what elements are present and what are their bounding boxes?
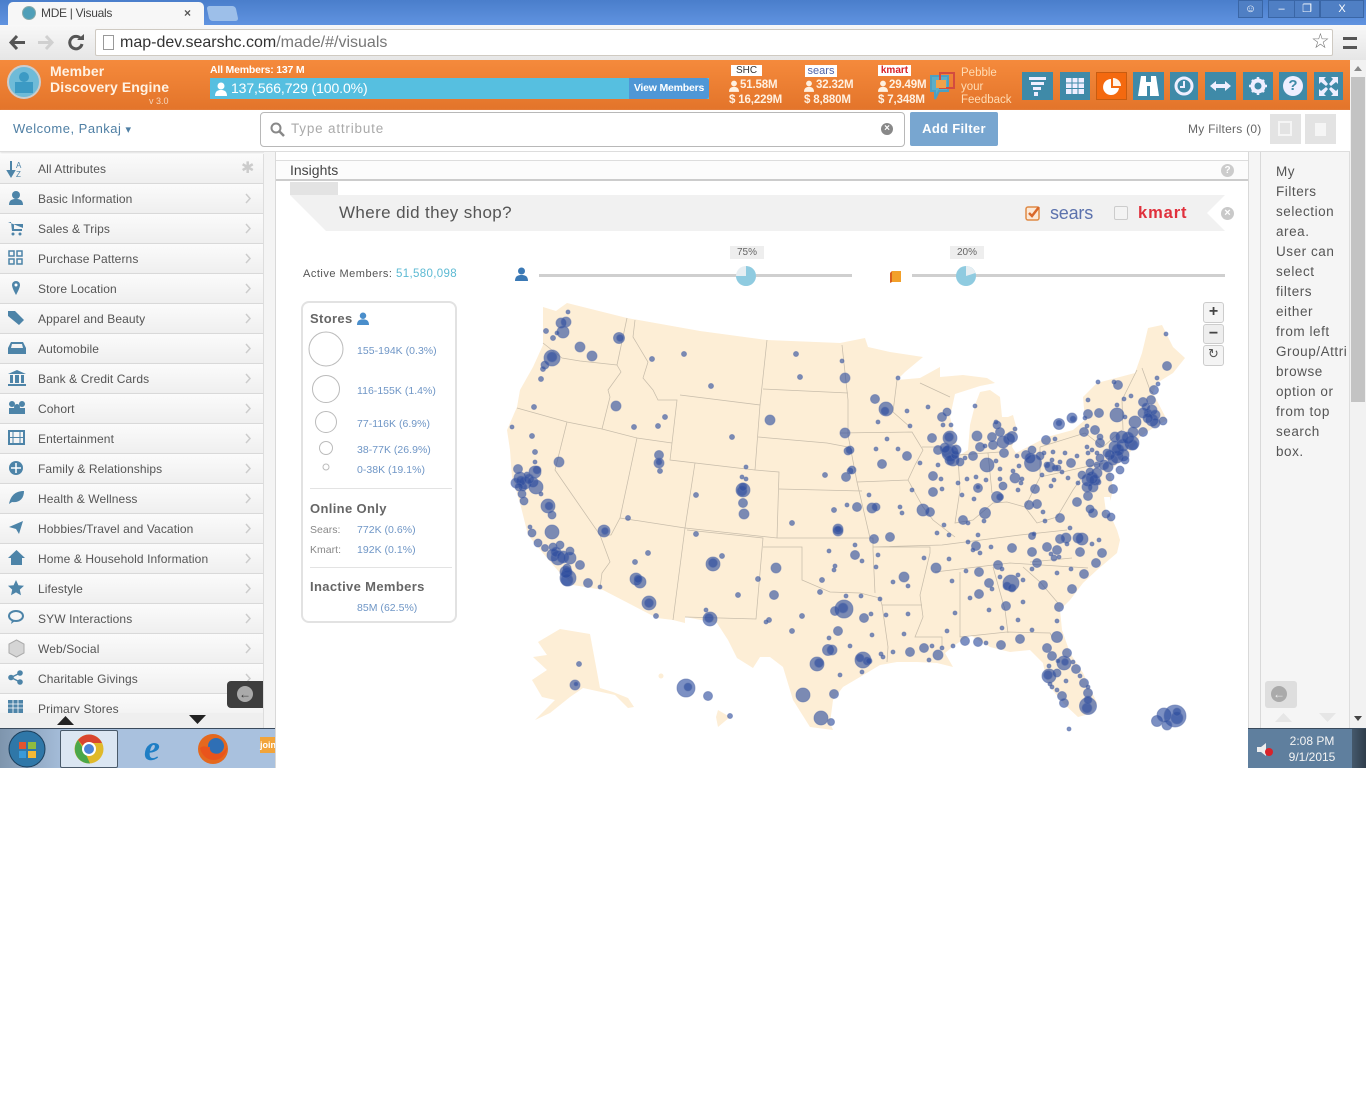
window controls [1238, 0, 1364, 18]
help button [1279, 72, 1307, 100]
address bar: ☆ [1311, 30, 1330, 53]
window controls: X [1338, 3, 1346, 15]
active tab [8, 2, 204, 25]
internet explorer icon: e [144, 728, 160, 768]
attribute row: lifestyle [0, 574, 263, 604]
members count: 137,566,729 (100.0%) [231, 80, 368, 96]
page scrollbar [1350, 60, 1366, 728]
member slider [515, 246, 852, 286]
sears logo: sears [1050, 203, 1093, 223]
stores heading: Stores [310, 311, 353, 326]
attribute row: entertainment [0, 424, 263, 454]
panel collapse button: ← [1273, 687, 1285, 701]
chrome taskbar button [60, 730, 118, 768]
kmart stats [878, 65, 926, 106]
sidebar collapse button [227, 681, 263, 708]
legend label: 77-116K (6.9%) [357, 418, 430, 430]
scrollbar down arrow [1354, 716, 1362, 721]
panel scroll down [1320, 713, 1336, 722]
attribute row: purchase patterns: Purchase Patterns [38, 252, 138, 266]
attribute row: basic information [0, 184, 263, 214]
clear icon: × [884, 123, 890, 134]
feedback bubble icon [930, 72, 955, 100]
legend label: 38-77K (26.9%) [357, 444, 431, 456]
sidebar collapse button: ← [239, 687, 251, 701]
attribute row: automobile [0, 334, 263, 364]
sears online label: Sears: [310, 524, 340, 536]
attribute row: web and social [0, 634, 263, 664]
add filter button: Add Filter [922, 121, 986, 136]
attribute row: purchase patterns [0, 244, 263, 274]
slider track [912, 274, 1225, 277]
attribute row: all attributes: A [16, 161, 22, 170]
kmart online value: 192K (0.1%) [357, 544, 416, 556]
back arrow [9, 35, 25, 50]
speaker mute icon [1257, 743, 1273, 756]
attribute row: bank and credit cards: Bank & Credit Cards [38, 372, 149, 386]
sears checkbox [1025, 206, 1040, 221]
horizontal arrows button [1205, 72, 1236, 100]
SHC stats [729, 65, 782, 106]
online only heading: Online Only [310, 501, 387, 516]
all members label: All Members: 137 M [210, 64, 304, 76]
zoom out [1203, 324, 1224, 344]
inactive value: 85M (62.5%) [357, 602, 417, 614]
zoom reset [1203, 345, 1224, 366]
legend label: 155-194K (0.3%) [357, 345, 437, 357]
kmart logo: kmart [881, 65, 908, 76]
water patches [1104, 497, 1112, 517]
slider thumb [956, 266, 976, 286]
browser toolbar [0, 25, 1366, 60]
my filters label: My Filters (0) [1188, 122, 1262, 136]
clear icon [881, 123, 893, 135]
map zoom controls [1203, 302, 1224, 366]
attribute row: store location: Store Location [38, 282, 117, 296]
address bar: map-dev.searshc.com/made/#/visuals [120, 34, 387, 51]
sidebar [0, 154, 264, 714]
attribute row: home and household information [0, 544, 263, 574]
size legend circles [308, 332, 344, 470]
sidebar scroll bar [0, 713, 264, 728]
percent badge: 20% [957, 247, 977, 258]
logo magnifier [7, 65, 41, 99]
delete button [1305, 114, 1336, 144]
filter help text: My Filters selection area. User can select filters either from left Group/Attri browse option or from top search box. [1276, 164, 1347, 459]
search icon [270, 122, 285, 137]
clock: 2:08 PM [1290, 734, 1334, 748]
slider thumb [736, 266, 756, 286]
app title: Discovery Engine [50, 79, 169, 95]
attribute row: home and household information: Home & Household Information [38, 552, 208, 566]
attribute row: lifestyle: Lifestyle [38, 582, 83, 596]
reload icon [68, 34, 84, 50]
welcome sub bar [0, 110, 1350, 152]
attribute row: automobile: Automobile [38, 342, 99, 356]
attribute row: family and relationships [0, 454, 263, 484]
attribute row: primary stores [0, 694, 263, 724]
scroll down [189, 715, 206, 724]
insights title: Insights [290, 162, 338, 178]
SHC stats: 51.58M [740, 79, 777, 91]
insights panel [275, 152, 1249, 768]
attribute row: hobbies travel and vacation [0, 514, 263, 544]
scroll up [57, 716, 74, 725]
question band [290, 195, 1224, 231]
kmart stats: 29.49M [889, 79, 926, 91]
address bar [95, 29, 1333, 56]
attribute row: entertainment: Entertainment [38, 432, 114, 446]
attribute row: sales and trips: Sales & Trips [38, 222, 110, 236]
basket icon [890, 271, 901, 283]
page icon [103, 35, 114, 50]
attribute row: hobbies travel and vacation: Hobbies/Travel and Vacation [38, 522, 193, 536]
chrome icon [74, 734, 104, 764]
sears stats: 32.32M [816, 79, 853, 91]
sears stats: $ 8,880M [804, 94, 851, 106]
legend label: 0-38K (19.1%) [357, 464, 425, 476]
app title [50, 63, 169, 95]
scrollbar thumb [1351, 77, 1365, 402]
attribute row: syw interactions [0, 604, 263, 634]
binoculars button [1133, 72, 1164, 100]
zoom out: − [1209, 325, 1218, 342]
attribute row: all attributes: All Attributes [38, 162, 106, 176]
percent badge [950, 246, 984, 259]
sears logo: sears [808, 65, 834, 77]
land [507, 303, 1185, 730]
inactive members heading: Inactive Members [310, 579, 425, 594]
feedback text: your [961, 80, 983, 92]
close question: × [1224, 207, 1231, 219]
attribute row: health and wellness [0, 484, 263, 514]
store bubbles [510, 310, 1186, 731]
feedback text: Pebble [961, 67, 997, 79]
question tab [290, 182, 338, 195]
pie chart button [1096, 72, 1127, 100]
welcome user: Welcome, Pankaj ▾ [13, 121, 132, 136]
kmart logo: kmart [1138, 204, 1187, 222]
right filter panel [1249, 152, 1350, 728]
add filter button [910, 112, 998, 146]
panel collapse button [1265, 681, 1297, 708]
view members button [629, 78, 709, 99]
attribute row: basic information: Basic Information [38, 192, 132, 206]
show desktop [1352, 729, 1366, 768]
SHC stats: $ 16,229M [729, 94, 782, 106]
person icon [215, 82, 227, 96]
attribute row: cohort [0, 394, 263, 424]
window controls: ☺ [1245, 3, 1256, 15]
kmart stats: $ 7,348M [878, 94, 925, 106]
tab favicon [22, 6, 36, 20]
attribute row: all attributes: ✱ [241, 160, 255, 177]
taskbar left [0, 728, 275, 768]
active tab: × [184, 6, 191, 20]
feedback text: Feedback [961, 94, 1012, 106]
join icon [260, 737, 275, 753]
taskbar right [1248, 728, 1366, 768]
browser tab strip [0, 0, 1366, 25]
kmart checkbox [1114, 206, 1128, 220]
active tab: MDE | Visuals [41, 6, 112, 20]
attribute row: health and wellness: Health & Wellness [38, 492, 138, 506]
scrollbar up arrow [1354, 66, 1362, 71]
attribute row: sales and trips [0, 214, 263, 244]
sears stats [804, 65, 853, 106]
attribute row: cohort: Cohort [38, 402, 75, 416]
help button: ? [1288, 77, 1298, 94]
funnel button [1022, 72, 1053, 100]
US bubble map [507, 303, 1186, 732]
attribute row: all attributes [0, 154, 263, 184]
insights help icon: ? [1224, 165, 1231, 176]
attribute row: all attributes: Z [16, 170, 21, 179]
legend label: 116-155K (1.4%) [357, 385, 436, 397]
legend panel [301, 301, 457, 623]
attribute row: store location [0, 274, 263, 304]
attribute row: web and social: Web/Social [38, 642, 99, 656]
sears online value: 772K (0.6%) [357, 524, 416, 536]
zoom in: + [1209, 303, 1218, 320]
app title: Member [50, 63, 104, 79]
percent badge [730, 246, 764, 259]
attribute row: syw interactions: SYW Interactions [38, 612, 132, 626]
settings button [1243, 72, 1273, 100]
version: v 3.0 [149, 96, 169, 106]
clock [1289, 734, 1335, 764]
table button [1060, 72, 1090, 100]
attribute row: family and relationships: Family & Relationships [38, 462, 162, 476]
attribute row: apparel and beauty: Apparel and Beauty [38, 312, 145, 326]
clock button [1170, 72, 1198, 100]
members progress bar [210, 78, 709, 99]
person icon [515, 268, 528, 281]
new tab button [206, 6, 239, 21]
active members: Active Members: 51,580,098 [303, 268, 457, 280]
window controls: – [1278, 3, 1285, 15]
state borders [517, 318, 1153, 662]
view members button: View Members [634, 82, 704, 94]
zoom in [1203, 302, 1224, 323]
zoom reset: ↻ [1208, 347, 1219, 362]
feedback text [961, 67, 1012, 106]
orange app header [0, 60, 1350, 110]
insights header [276, 160, 1248, 181]
fullscreen button [1314, 72, 1343, 100]
window controls: ❐ [1302, 3, 1312, 15]
slider track [539, 274, 852, 277]
panel scroll up [1276, 714, 1292, 722]
SHC logo: SHC [736, 65, 757, 76]
save button [1270, 114, 1301, 144]
close question [1221, 207, 1234, 220]
attribute row: bank and credit cards [0, 364, 263, 394]
insights help icon [1221, 164, 1234, 177]
attribute row: apparel and beauty [0, 304, 263, 334]
percent badge: 75% [737, 247, 757, 258]
start orb [8, 730, 46, 768]
SHC logo [731, 65, 762, 76]
clock: 9/1/2015 [1289, 750, 1335, 764]
stores person icon [357, 312, 369, 325]
attribute row: charitable givings: Charitable Givings [38, 672, 138, 686]
kmart online label: Kmart: [310, 544, 341, 556]
question title: Where did they shop? [339, 203, 512, 222]
attribute row: charitable givings [0, 664, 263, 694]
gutter [264, 152, 275, 728]
forward arrow [38, 35, 54, 50]
chrome menu [1343, 37, 1357, 49]
search placeholder: Type attribute [291, 121, 384, 136]
basket slider [890, 246, 1225, 286]
firefox icon [198, 734, 228, 764]
attribute search input [260, 112, 905, 147]
